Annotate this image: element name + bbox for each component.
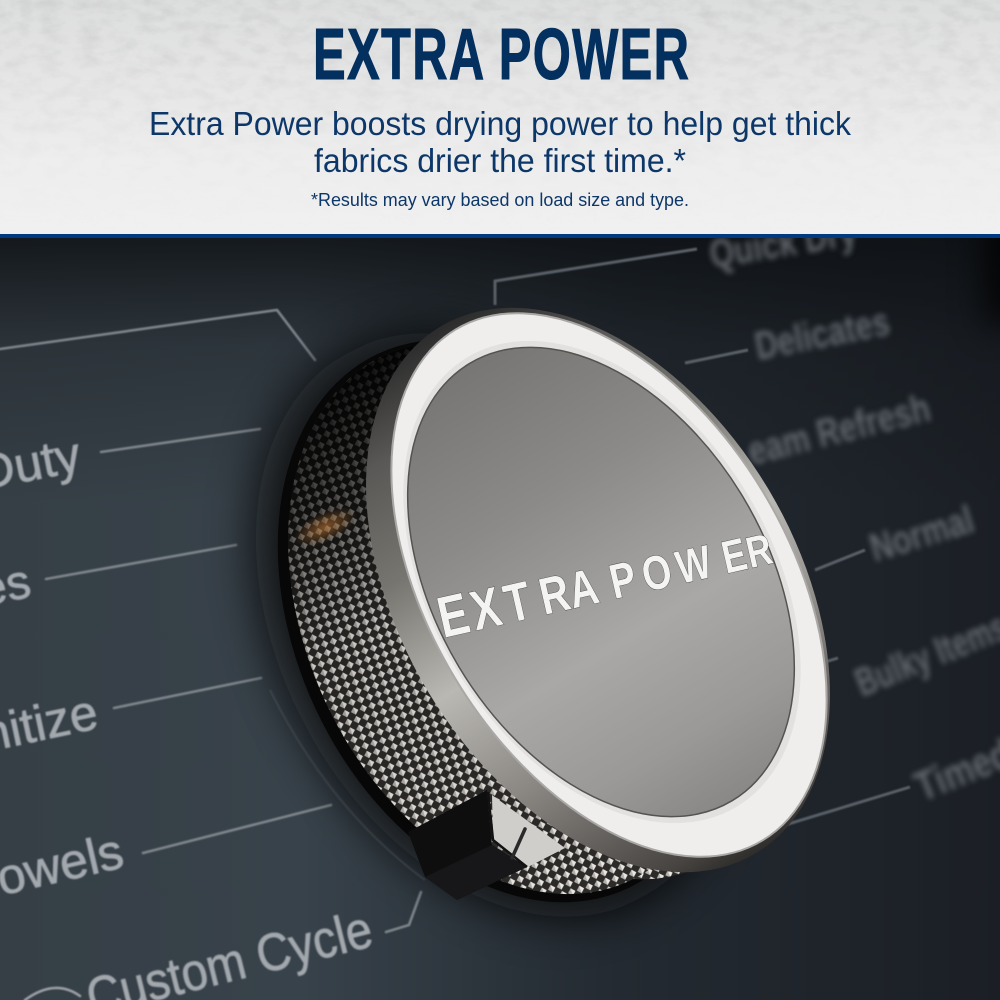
dial face label: P [605, 551, 641, 610]
panel: header [0, 0, 1000, 234]
panel: dryer control photo [0, 210, 1000, 1000]
description text: Extra Power boosts drying power to help get thick [149, 105, 851, 142]
dial face label: E [432, 581, 475, 651]
dial face label: A [563, 558, 604, 619]
dial surround arc [270, 690, 425, 880]
outer metal bevel [366, 308, 830, 872]
footnote: *Results may vary based on load size and type. [311, 190, 689, 210]
right blurred cycle labels [707, 210, 1000, 810]
dial face [406, 346, 796, 818]
knurled side [278, 342, 686, 902]
right blurred cycle labels: eam Refresh [744, 386, 935, 474]
dial face label: X [465, 575, 507, 643]
right blurred cycle labels: Quick Dry [707, 210, 860, 277]
dial face label: E [717, 528, 752, 584]
left cycle labels [0, 426, 378, 1000]
pointer handle [408, 790, 565, 900]
white ring [390, 312, 828, 858]
right blurred cycle labels: Delicates [751, 300, 893, 369]
dial [278, 308, 830, 902]
dial face label: O [637, 544, 677, 603]
right leader lines [495, 249, 910, 825]
description text: fabrics drier the first time.* [314, 142, 686, 179]
dial face label: R [534, 563, 575, 626]
dial face label: T [499, 570, 537, 635]
left leader lines [0, 310, 421, 1000]
dial face label: W [671, 535, 716, 594]
description text [149, 105, 851, 179]
dial shadow [222, 314, 702, 938]
title: EXTRA POWER [313, 15, 689, 95]
dial face label: R [742, 525, 777, 578]
header divider [0, 234, 1000, 238]
